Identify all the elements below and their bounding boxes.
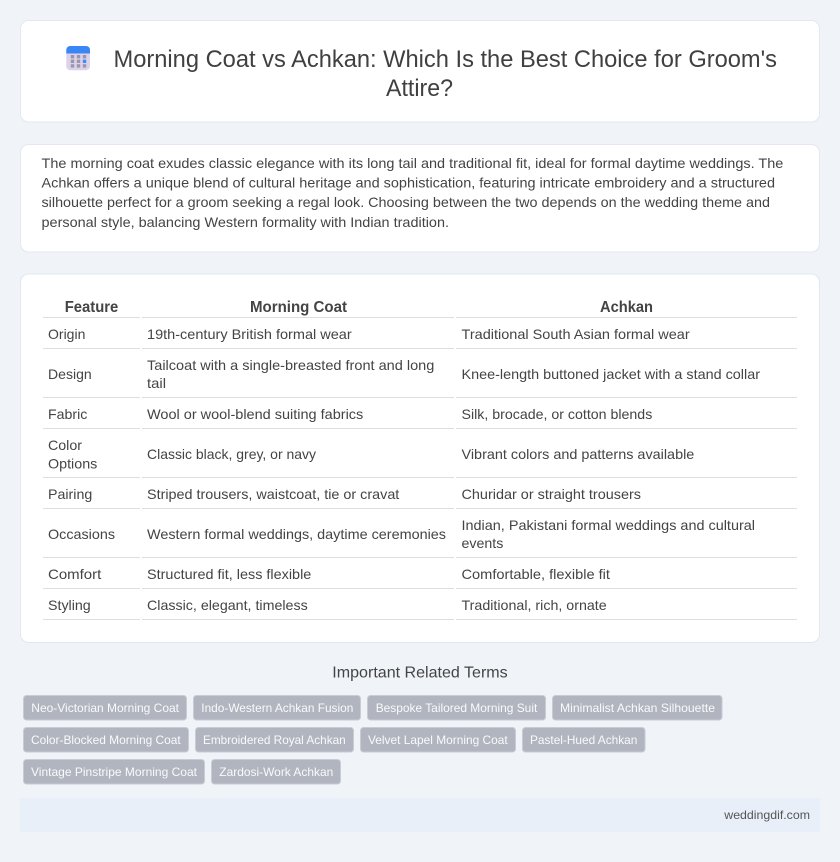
- row: fabric: Silk, brocade, or cotton blends: [462, 406, 652, 422]
- table header row: Feature: [65, 299, 118, 316]
- row: styling: Styling: [48, 597, 91, 613]
- tag: [212, 760, 340, 784]
- tag: [194, 696, 360, 720]
- row: pairing: Pairing: [48, 486, 92, 502]
- row: styling: Traditional, rich, ornate: [462, 597, 607, 613]
- title: [114, 46, 777, 102]
- row: comfort: Comfortable, flexible fit: [462, 566, 610, 582]
- row: color options: Options: [48, 456, 97, 472]
- row: pairing: [48, 486, 641, 502]
- tag: Color-Blocked Morning Coat: [31, 733, 181, 747]
- row: origin: 19th-century British formal wear: [147, 326, 352, 342]
- row: occasions: [48, 517, 755, 551]
- row: comfort: Structured fit, less flexible: [147, 566, 312, 582]
- footer: [20, 798, 820, 832]
- tag: [368, 696, 546, 720]
- table header row: Achkan: [600, 299, 653, 316]
- row: color options: [48, 437, 695, 472]
- tag: Zardosi-Work Achkan: [219, 765, 333, 779]
- tag: Bespoke Tailored Morning Suit: [376, 701, 538, 715]
- heading: important related terms: Important Related Terms: [332, 664, 508, 682]
- row: occasions: events: [462, 535, 503, 551]
- related term tags: [24, 696, 722, 784]
- row: origin: [48, 326, 690, 342]
- tag: [24, 728, 188, 752]
- tag: Minimalist Achkan Silhouette: [560, 701, 715, 715]
- row: pairing: Striped trousers, waistcoat, tie or cravat: [147, 486, 399, 502]
- title: Morning Coat vs Achkan: Which Is the Best Choice for Groom's: [114, 46, 777, 73]
- row: design: Design: [48, 366, 92, 382]
- row: comfort: [48, 566, 610, 582]
- tag: Embroidered Royal Achkan: [203, 733, 346, 747]
- tag: [360, 728, 516, 752]
- tag: Vintage Pinstripe Morning Coat: [31, 765, 198, 779]
- tag: Velvet Lapel Morning Coat: [368, 733, 508, 747]
- tag: [24, 760, 204, 784]
- row: design: Knee-length buttoned jacket with a stand collar: [462, 366, 760, 382]
- row: styling: Classic, elegant, timeless: [147, 597, 308, 613]
- row: color options: Vibrant colors and patterns available: [462, 446, 695, 462]
- table header row: Morning Coat: [250, 299, 348, 316]
- row: pairing: Churidar or straight trousers: [462, 486, 641, 502]
- row: color options: Color: [48, 437, 82, 453]
- row: occasions: Indian, Pakistani formal weddings and cultural: [462, 517, 755, 533]
- row: design: Tailcoat with a single-breasted front and long: [147, 357, 434, 373]
- row: design: tail: [147, 375, 166, 391]
- row: fabric: [48, 406, 652, 422]
- row: origin: Origin: [48, 326, 85, 342]
- panel: introduction: [20, 144, 820, 252]
- row: design: [48, 357, 760, 391]
- row: fabric: Fabric: [48, 406, 87, 422]
- icon: calendar: [66, 46, 90, 70]
- row: styling: [48, 597, 607, 613]
- row: origin: Traditional South Asian formal wear: [462, 326, 690, 342]
- tag: [552, 696, 722, 720]
- title: Attire?: [386, 75, 453, 102]
- text block: introduction: personal style, balancing Western formality with Indian tradition.: [42, 214, 449, 230]
- tag: [24, 696, 186, 720]
- tag: [196, 728, 354, 752]
- tag: [522, 728, 645, 752]
- text block: introduction: silhouette perfect for a groom seeking a regal look. Choosing between the two depends on the wedding theme and: [42, 194, 770, 210]
- row: occasions: Western formal weddings, daytime ceremonies: [147, 526, 446, 542]
- row: comfort: Comfort: [48, 566, 101, 582]
- tag: Neo-Victorian Morning Coat: [31, 701, 180, 715]
- table header row: [65, 299, 653, 316]
- row: occasions: Occasions: [48, 526, 115, 542]
- row: color options: Classic black, grey, or navy: [147, 446, 316, 462]
- tag: Indo-Western Achkan Fusion: [201, 701, 353, 715]
- text block: introduction: The morning coat exudes classic elegance with its long tail and traditional fit, ideal for formal daytime weddings. The: [42, 155, 784, 171]
- footer: weddingdif.com: [723, 808, 810, 822]
- tag: Pastel-Hued Achkan: [530, 733, 637, 747]
- text block: introduction: [42, 155, 784, 230]
- panel: header: [20, 20, 820, 122]
- row: fabric: Wool or wool-blend suiting fabrics: [147, 406, 363, 422]
- text block: introduction: Achkan offers a unique blend of cultural heritage and sophistication, featuring intricate embroidery and a structured: [42, 175, 775, 191]
- panel: comparison table: [20, 274, 820, 642]
